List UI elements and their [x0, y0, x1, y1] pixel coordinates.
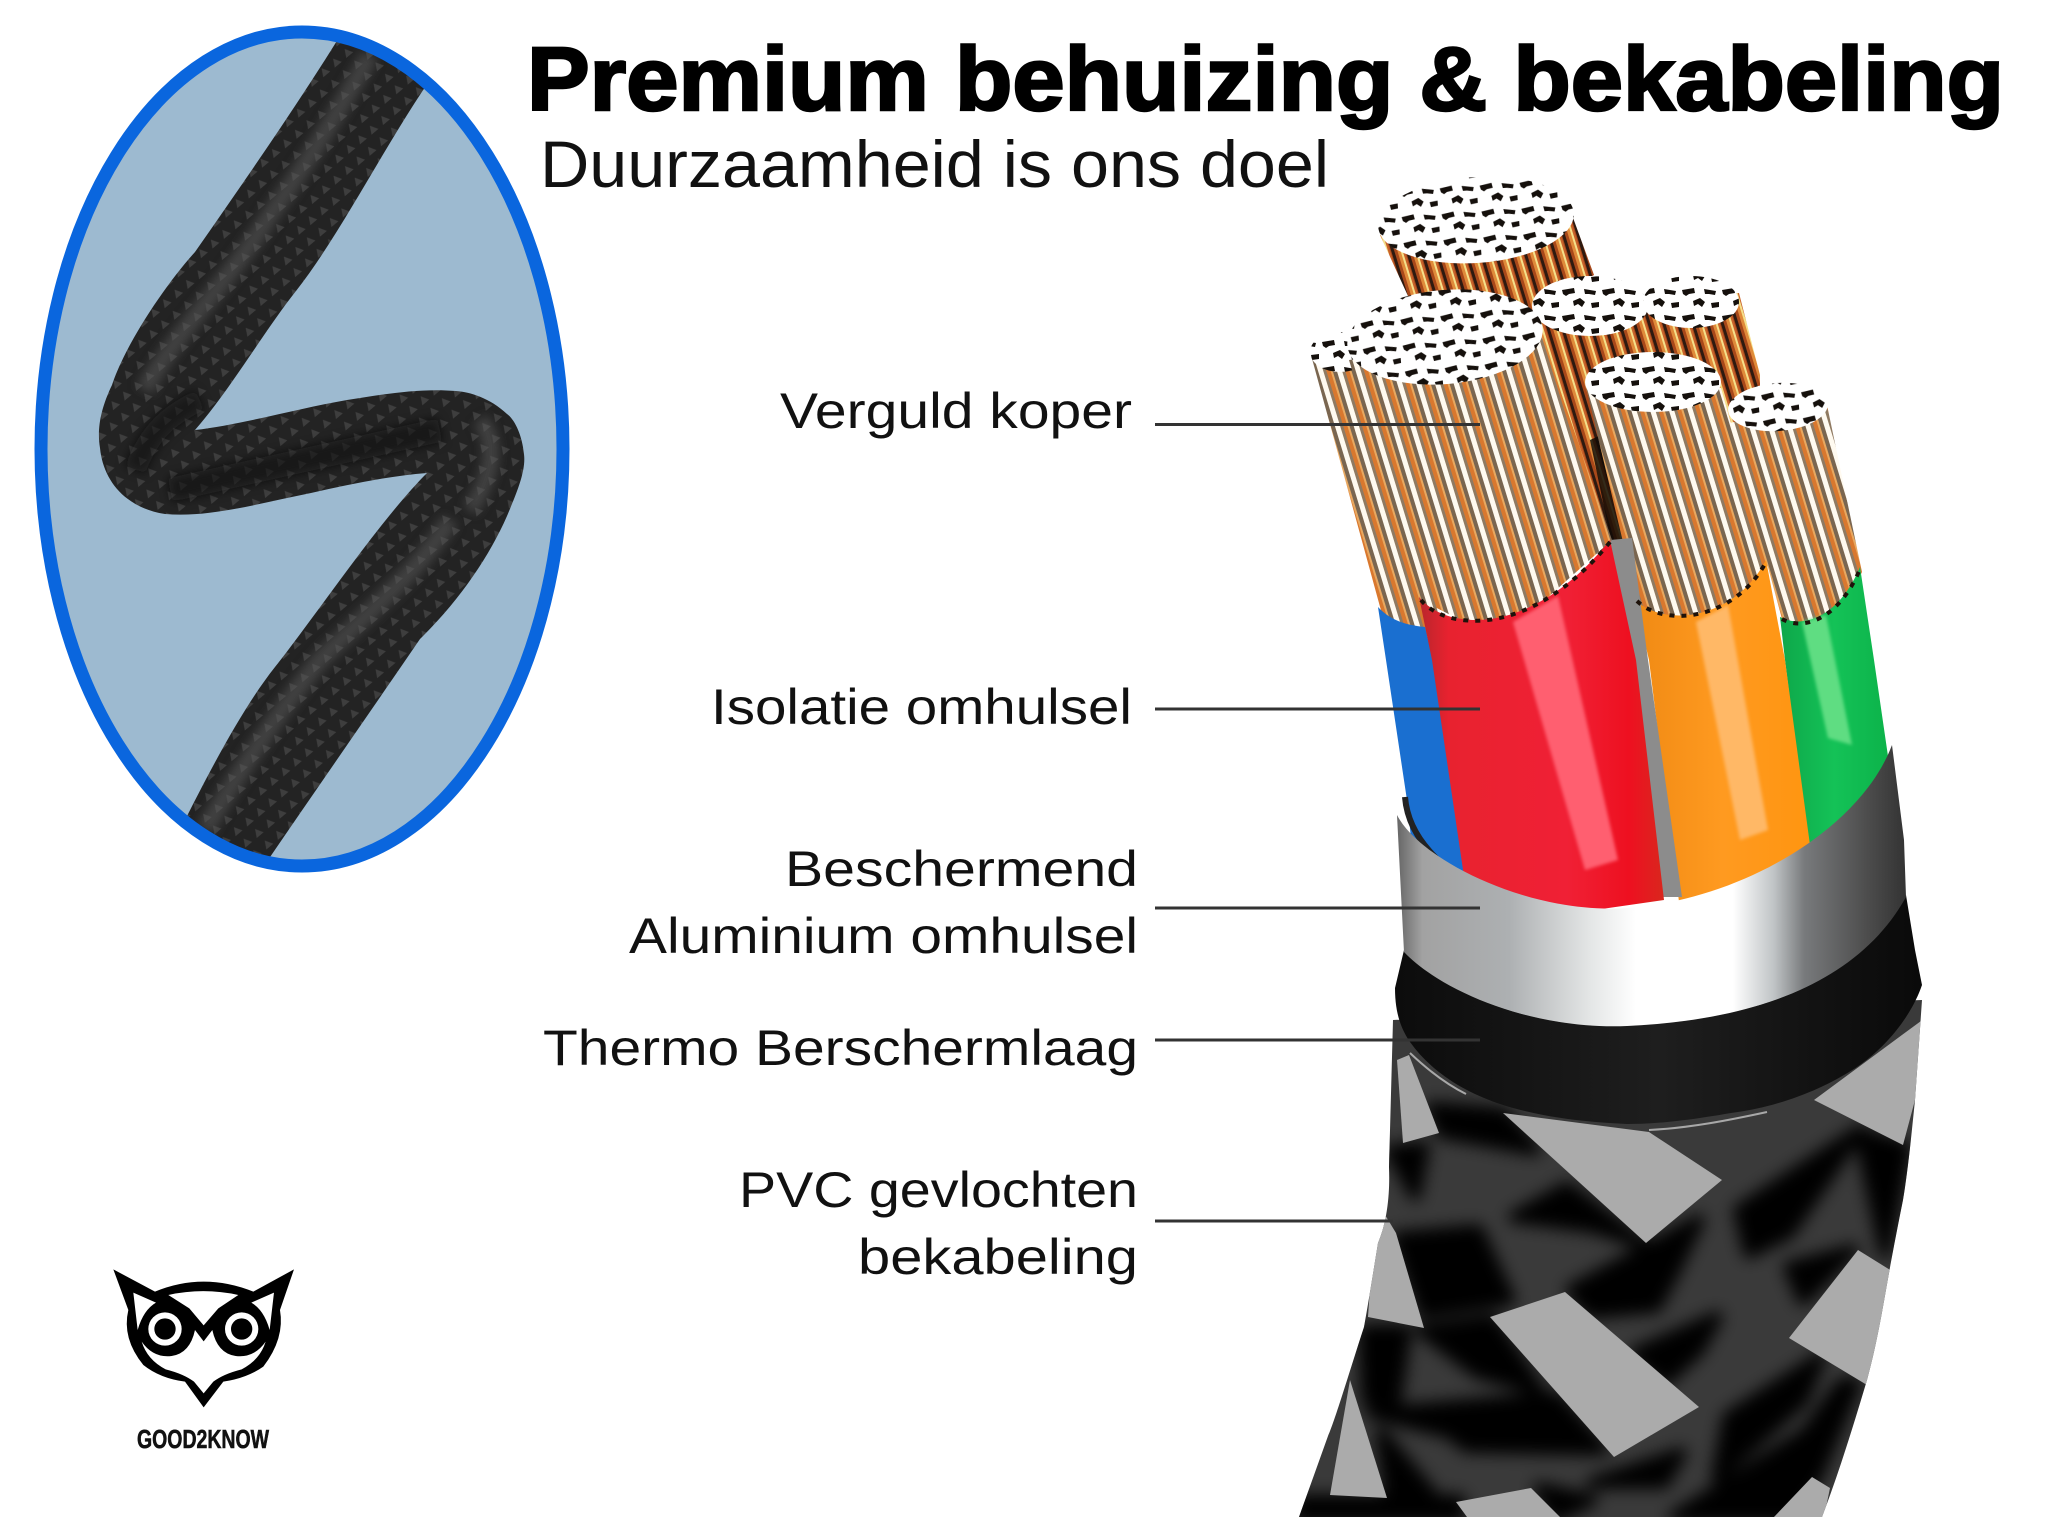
callout line: PVC [1155, 1220, 1393, 1222]
label: PVC braid [739, 1162, 1138, 1285]
orange insulation [1635, 560, 1812, 910]
oval blue border [41, 32, 563, 866]
owl logo [113, 1269, 294, 1407]
title: Premium behuizing & bekabeling [527, 30, 2004, 130]
oval background [41, 32, 563, 866]
owl eyes [148, 1312, 258, 1346]
large copper strand (red) [1343, 282, 1612, 640]
label: PVC braid: PVC gevlochten [739, 1162, 1138, 1218]
back copper strand: top [1375, 170, 1594, 330]
label: copper: Verguld koper [780, 383, 1132, 439]
logo wordmark: GOOD2KNOW [137, 1424, 269, 1454]
cable cross-section illustration [1290, 170, 1940, 1517]
aluminium ring [1397, 745, 1906, 1026]
back copper strand: right [1643, 276, 1760, 480]
callout line: insulation [1155, 708, 1480, 710]
subtitle: Duurzaamheid is ons doel [540, 127, 1329, 201]
green insulation [1780, 567, 1890, 860]
owl head [113, 1269, 294, 1407]
right copper strand (green) [1726, 380, 1862, 640]
oval photo: bent braided cable [41, 30, 563, 870]
braided cable in S-shape [98, 42, 524, 856]
label: insulation: Isolatie omhulsel [711, 679, 1132, 735]
label: aluminium: Aluminium omhulsel [629, 908, 1138, 964]
blue insulation [1378, 607, 1490, 890]
label: PVC braid: bekabeling [858, 1229, 1138, 1285]
braided PVC jacket [1290, 1000, 1940, 1517]
label: aluminium: Beschermend [785, 841, 1138, 897]
label: aluminium [629, 841, 1138, 964]
light braid patches [1330, 1018, 1925, 1517]
callout line: thermo [1155, 1038, 1480, 1042]
back copper strand: middle [1532, 276, 1710, 570]
strand-end scallops [1421, 542, 1860, 623]
red insulation [1419, 540, 1664, 915]
callout line: aluminium [1155, 906, 1480, 910]
callout line: copper [1155, 423, 1480, 426]
owl inner white shapes [133, 1291, 274, 1393]
label: thermo: Thermo Berschermlaag [543, 1020, 1138, 1076]
grey filler strip [1610, 538, 1682, 897]
front copper strand (orange) [1585, 352, 1770, 640]
thermo protective layer [1395, 895, 1922, 1124]
braid dark strands [1300, 1107, 1906, 1517]
callout lines [1155, 424, 1480, 1221]
left copper strand (blue) [1310, 332, 1445, 640]
